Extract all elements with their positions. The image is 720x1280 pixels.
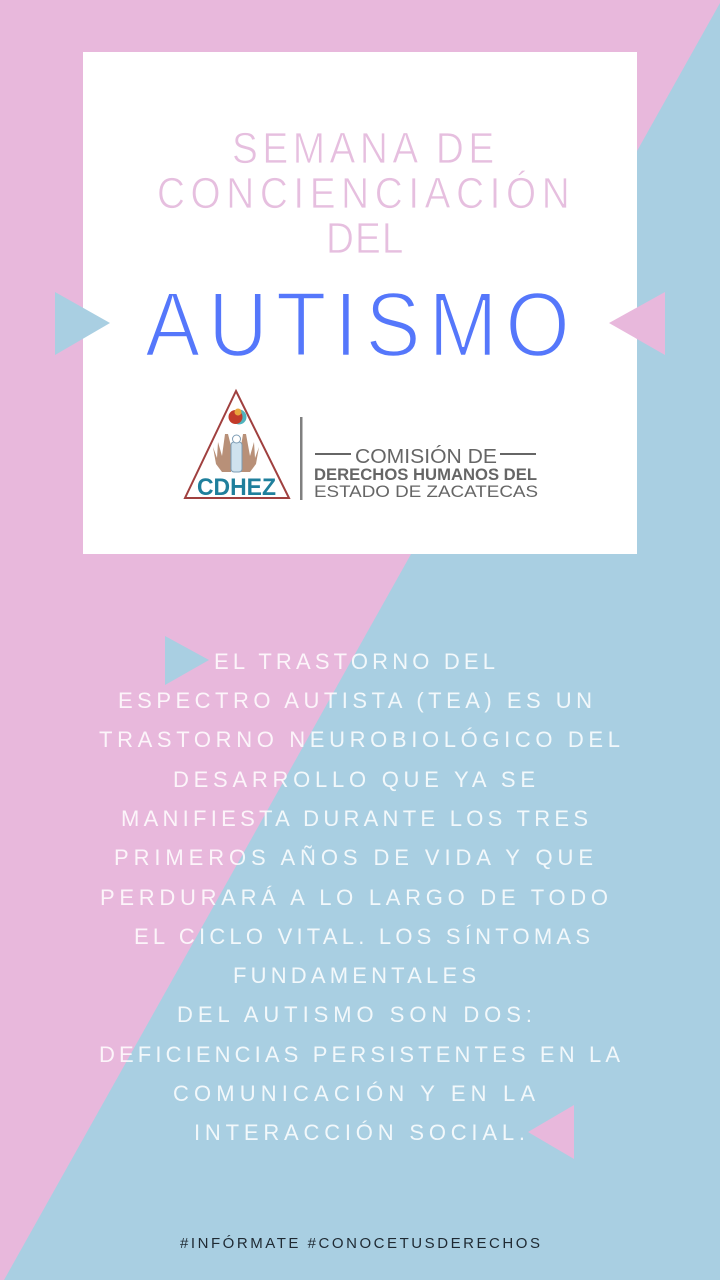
icon: pink triangle at text end [528,1105,574,1159]
text: comisión de derechos humanos [314,445,538,501]
title: semana de concienciación del: CONCIENCIACIÓN [157,168,570,218]
text block: definition of autism: MANIFIESTA DURANTE LOS TRES [121,806,588,831]
icon: blue triangle at text start [165,636,209,685]
text block: definition of autism: PRIMEROS AÑOS DE VIDA Y QUE [114,845,593,870]
divider line [300,417,302,500]
text: comisión de derechos humanos: ESTADO DE ZACATECAS [314,482,538,501]
logo: CDHEZ [185,391,538,501]
icon: blue triangle left of heading [55,292,110,355]
text block: definition of autism: EL TRASTORNO DEL [214,649,495,674]
text block: definition of autism: ESPECTRO AUTISTA (TEA) ES UN [118,688,592,713]
title: semana de concienciación del [157,123,570,263]
text block: definition of autism: DESARROLLO QUE YA SE [173,767,535,792]
text block: definition of autism: TRASTORNO NEUROBIOLÓGICO DEL [99,727,620,752]
text block: definition of autism: FUNDAMENTALES [233,963,476,988]
text: comisión de derechos humanos: DERECHOS HUMANOS DEL [314,466,537,484]
icon: triangle emblem: CDHEZ [197,474,276,501]
text block: definition of autism: INTERACCIÓN SOCIAL. [194,1120,525,1145]
text block: definition of autism: EL CICLO VITAL. LOS SÍNTOMAS [134,924,590,949]
text block: definition of autism: DEFICIENCIAS PERSISTENTES EN LA [99,1042,620,1067]
text: comisión de derechos humanos: COMISIÓN DE [355,445,497,468]
panel: white title card [83,52,637,554]
icon: pink triangle right of heading [609,292,665,355]
text block: definition of autism [99,649,620,1145]
hashtags: #INFÓRMATE #CONOCETUSDERECHOS [180,1235,540,1252]
title: semana de concienciación del: SEMANA DE [232,123,494,173]
text block: definition of autism: COMUNICACIÓN Y EN LA [173,1081,535,1106]
text block: definition of autism: PERDURARÁ A LO LARGO DE TODO [100,885,608,910]
text block: definition of autism: DEL AUTISMO SON DOS: [177,1002,532,1027]
heading: autismo: AUTISMO [145,273,570,376]
title: semana de concienciación del: DEL [326,213,403,263]
icon: triangle emblem [185,391,289,501]
